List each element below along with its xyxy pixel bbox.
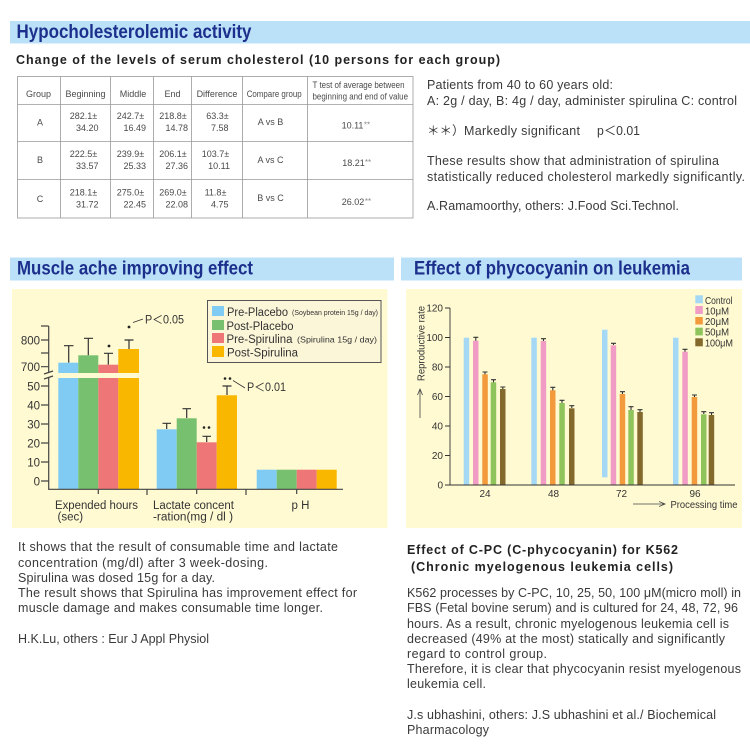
subheading: C-PC effect: (Chronic myelogenous leukemia cells) <box>411 560 673 574</box>
legend: muscle ache groups: Post-Placebo <box>226 321 294 333</box>
axis title: reproductive rate with arrow <box>416 306 428 418</box>
bars: 72 hours <box>602 330 643 485</box>
axis numbers: leukemia chart: 80 <box>432 362 443 374</box>
table: serum cholesterol levels: 206.1± <box>159 149 187 159</box>
axis numbers: muscle ache chart: 800 <box>21 336 40 348</box>
table: serum cholesterol levels: 275.0± <box>117 188 144 198</box>
axis numbers: muscle ache chart: 40 <box>27 400 40 412</box>
table: serum cholesterol levels: Group <box>26 89 51 99</box>
table: serum cholesterol levels: 63.3± <box>206 111 229 121</box>
text block: leukemia explanation: regard to control group. <box>407 647 547 661</box>
significance markers: P＜0.01 <box>247 382 286 394</box>
table: serum cholesterol levels: 22.45 <box>123 200 146 210</box>
axis numbers: leukemia chart: 120 <box>426 304 443 314</box>
table: serum cholesterol levels: ** <box>365 197 371 206</box>
table: serum cholesterol levels: 31.72 <box>76 200 98 210</box>
table: serum cholesterol levels: 222.5± <box>70 149 97 159</box>
table: serum cholesterol levels: 269.0± <box>159 188 187 198</box>
table: serum cholesterol levels: End <box>164 89 181 99</box>
text block: leukemia explanation: decreased (49% at the most) statically and significantly <box>407 632 726 646</box>
text block: study notes <box>427 78 745 213</box>
heading: Hypocholesterolemic activity <box>10 21 750 44</box>
text block: study notes: These results show that administration of spirulina <box>427 154 719 168</box>
table: serum cholesterol levels: 34.20 <box>76 123 98 133</box>
panel: muscle ache chart <box>12 289 388 528</box>
text block: muscle ache explanation: Spirulina was dosed 15g for a day. <box>18 571 215 585</box>
table: serum cholesterol levels: 10.11 <box>342 120 363 130</box>
text block: muscle ache explanation: muscle damage and makes consumable time longer. <box>18 601 323 615</box>
table: serum cholesterol levels: ** <box>365 158 371 167</box>
table: serum cholesterol levels: 27.36 <box>165 161 188 171</box>
text block: leukemia explanation: Therefore, it is clear that phycocyanin resist myelogenous <box>407 662 741 676</box>
axis numbers: muscle ache chart: 30 <box>27 420 40 432</box>
bars: pH <box>257 470 337 489</box>
axes: muscle ache chart <box>41 326 343 495</box>
bars: expended hours <box>58 338 139 489</box>
text block: study notes: A: 2g / day, B: 4g / day, administer spirulina C: control <box>427 94 737 108</box>
bars: 24 hours <box>464 338 506 485</box>
legend: muscle ache groups: (Soybean protein 15g / day) <box>292 308 378 317</box>
subheading: C-PC effect <box>407 543 678 574</box>
bars: 96 hours <box>673 338 714 485</box>
table: serum cholesterol levels: 103.7± <box>202 149 229 159</box>
axis numbers: leukemia chart <box>426 304 701 500</box>
heading: Hypocholesterolemic activity: Hypocholesterolemic activity <box>16 21 252 43</box>
axis title: processing time with arrow <box>633 500 738 511</box>
table: serum cholesterol levels: B vs C <box>257 193 284 203</box>
axis numbers: muscle ache chart: 0 <box>34 476 40 488</box>
legend: muscle ache groups: Pre-Placebo <box>227 307 288 319</box>
axis numbers: leukemia chart: 20 <box>432 451 443 462</box>
heading: Effect of phycocyanin on leukemia: Effect of phycocyanin on leukemia <box>414 258 690 280</box>
text block: muscle ache explanation <box>18 540 357 646</box>
table: serum cholesterol levels: 11.8± <box>205 188 226 198</box>
axis numbers: muscle ache chart: 700 <box>21 362 40 374</box>
axis numbers: leukemia chart: 72 <box>616 489 627 500</box>
table: serum cholesterol levels <box>18 76 413 218</box>
table: serum cholesterol levels: 33.57 <box>76 161 98 171</box>
text block: muscle ache explanation: concentration (mg/dl) after 3 week-dosing. <box>18 556 268 570</box>
table: serum cholesterol levels: 22.08 <box>165 200 188 210</box>
axis numbers: muscle ache chart: 10 <box>27 458 40 470</box>
legend: concentrations: Control <box>705 296 732 307</box>
axis numbers: leukemia chart: 0 <box>437 480 443 492</box>
legend: concentrations <box>695 295 733 349</box>
category labels: (sec) <box>58 512 83 524</box>
subheading: C-PC effect: Effect of C-PC (C-phycocyanin) for K562 <box>407 543 678 557</box>
table: serum cholesterol levels: 25.33 <box>123 161 146 171</box>
axis numbers: leukemia chart: 100 <box>426 333 443 344</box>
table: serum cholesterol levels: 218.8± <box>159 111 187 121</box>
category labels: Lactate concent <box>153 500 235 512</box>
table: serum cholesterol levels: 26.02 <box>342 197 364 207</box>
table: serum cholesterol levels: ** <box>364 120 370 130</box>
table: serum cholesterol levels: 16.49 <box>123 123 146 133</box>
category labels <box>55 500 309 524</box>
subheading: table title: Change of the levels of serum cholesterol (10 persons for each group) <box>16 53 500 67</box>
axis numbers: leukemia chart: 96 <box>689 489 701 500</box>
significance markers <box>108 314 286 429</box>
text block: study notes: ＊＊） <box>427 124 465 138</box>
legend: concentrations: 50μM <box>705 328 729 339</box>
text block: study notes: Patients from 40 to 60 years old: <box>427 78 613 92</box>
legend: muscle ache groups: Post-Spirulina <box>227 348 299 360</box>
text block: leukemia explanation: K562 processes by C-PC, 10, 25, 50, 100 μM(micro moll) in <box>407 586 741 600</box>
axis numbers: muscle ache chart <box>21 336 40 488</box>
table: serum cholesterol levels: 18.21 <box>342 158 365 168</box>
legend: muscle ache groups: (Spirulina 15g / day) <box>297 334 377 344</box>
table: serum cholesterol levels: 242.7± <box>117 111 144 121</box>
table: serum cholesterol levels: 7.58 <box>211 123 228 133</box>
axes: leukemia chart <box>445 308 735 485</box>
text block: study notes: p＜0.01 <box>597 124 640 138</box>
text block: leukemia explanation: Pharmacology <box>407 723 490 737</box>
text block: leukemia explanation: hours. As a result, chronic myelogenous leukemia cell is <box>407 617 729 631</box>
table: serum cholesterol levels: B <box>37 155 43 165</box>
table: serum cholesterol levels: Beginning <box>65 89 106 99</box>
table: serum cholesterol levels: C <box>37 194 44 204</box>
text block: muscle ache explanation: The result shows that Spirulina has improvement effect for <box>18 586 357 600</box>
axis numbers: leukemia chart: 48 <box>548 489 559 500</box>
heading: Muscle ache improving effect: Muscle ache improving effect <box>17 258 253 280</box>
text block: leukemia explanation: leukemia cell. <box>407 677 486 691</box>
text block: leukemia explanation: FBS (Fetal bovine serum) and is cultured for 24, 48, 72, 96 <box>407 601 738 615</box>
significance markers: P＜0.05 <box>145 314 184 326</box>
panel: leukemia chart <box>406 289 742 528</box>
error bars: leukemia chart <box>473 337 714 415</box>
bars: 48 hours <box>531 338 574 485</box>
table: serum cholesterol levels: beginning and end of value <box>312 92 408 102</box>
text block: study notes: statistically reduced cholesterol markedly significantly. <box>427 170 745 184</box>
axis numbers: muscle ache chart: 50 <box>27 382 40 394</box>
table: serum cholesterol levels: A vs B <box>258 117 283 127</box>
table: serum cholesterol levels: 218.1± <box>70 188 97 198</box>
axis numbers: leukemia chart: 60 <box>432 392 443 403</box>
bars: lactate concentration <box>157 386 237 489</box>
legend: concentrations: 10μM <box>705 306 729 318</box>
text block: study notes: A.Ramamoorthy, others: J.Food Sci.Technol. <box>427 199 679 213</box>
table: serum cholesterol levels: Compare group <box>247 89 302 99</box>
axis numbers: muscle ache chart: 20 <box>27 438 40 450</box>
table: serum cholesterol levels: Middle <box>120 89 146 99</box>
text block: muscle ache explanation: It shows that the result of consumable time and lactate <box>18 540 338 554</box>
legend: concentrations: 100μM <box>705 338 733 349</box>
table: serum cholesterol levels: 4.75 <box>211 200 228 210</box>
category labels: Expended hours <box>55 500 138 512</box>
axis title: reproductive rate with arrow: Reproductive rate <box>416 306 428 381</box>
category labels: -ration(mg / dl ) <box>153 512 233 524</box>
heading: Muscle ache improving effect <box>10 258 394 280</box>
table: serum cholesterol levels: 14.78 <box>165 123 188 133</box>
text block: study notes: Markedly significant <box>464 124 581 138</box>
table: serum cholesterol levels: Difference <box>197 89 237 99</box>
table: serum cholesterol levels: 239.9± <box>117 149 144 159</box>
legend: muscle ache groups: Pre-Spirulina <box>226 334 293 346</box>
table: serum cholesterol levels: A <box>37 118 43 128</box>
text block: leukemia explanation: J.s ubhashini, others: J.S ubhashini et al./ Biochemical <box>407 708 716 722</box>
table: serum cholesterol levels: 10.11 <box>208 161 230 171</box>
legend: concentrations: 20μM <box>705 317 729 328</box>
text block: leukemia explanation <box>407 586 741 737</box>
text block: muscle ache explanation: H.K.Lu, others : Eur J Appl Physiol <box>18 632 209 646</box>
table: serum cholesterol levels: A vs C <box>257 155 284 165</box>
table: serum cholesterol levels: 282.1± <box>70 111 97 121</box>
table: serum cholesterol levels: T test of average between <box>312 80 404 90</box>
axis numbers: leukemia chart: 40 <box>432 422 443 432</box>
axis title: processing time with arrow: Processing time <box>670 500 738 511</box>
axis numbers: leukemia chart: 24 <box>479 489 491 500</box>
legend: muscle ache groups <box>208 300 381 362</box>
category labels: p H <box>292 500 309 512</box>
